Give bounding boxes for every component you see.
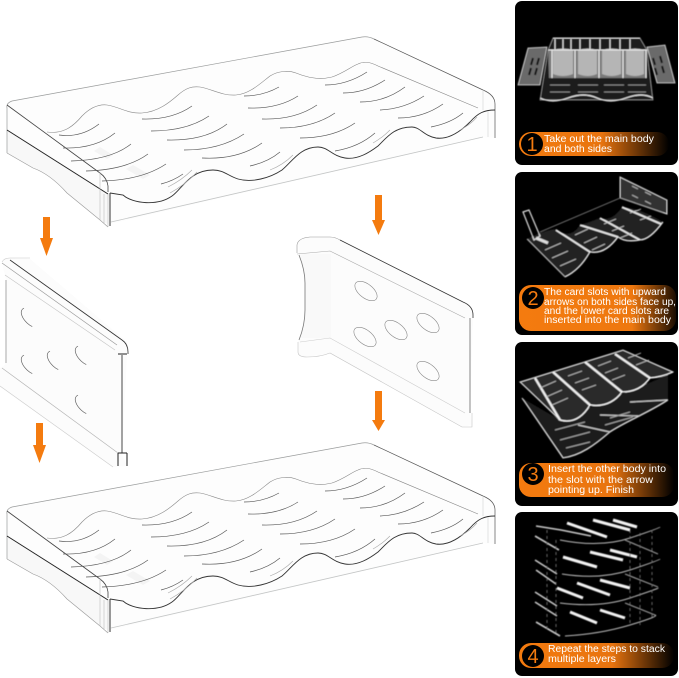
step 1 label: 1 [526,134,538,156]
step 2 label [519,285,676,331]
holes: right panel [350,277,443,385]
arrow: lower right [372,391,385,431]
side panel: right [297,237,473,427]
tray: bottom assembled body [6,443,495,633]
panel: step 1 [515,1,678,165]
step 4 photo: four stacked layers [535,520,660,636]
tray: top main body [6,37,495,227]
step 4 label: multiple layers [548,654,616,665]
step 4 label: Repeat the steps to stack [548,644,666,655]
side panel: left [0,258,128,467]
step 4 label [519,643,674,668]
step 2 label: arrows on both sides face up, [544,297,676,308]
step 2 label: 2 [528,288,539,310]
step 3 label: the slot with the arrow [548,475,654,486]
arrow: top left [40,217,53,256]
panel: step 2 [515,172,678,335]
arrow: lower left [33,423,46,463]
step 2 label: inserted into the main body [544,315,671,326]
step 1 label: Take out the main body [544,134,654,145]
panel: step 3 [515,342,678,506]
arrow: top right [372,195,385,235]
step 3 photo: stacked bodies [520,350,673,458]
step 3 label: pointing up. Finish [548,485,634,496]
holes: left panel [18,304,100,419]
step 1 label [519,132,669,156]
step 4 label: 4 [528,646,539,668]
step 3 label [519,463,674,497]
step 3 label: 3 [528,464,539,486]
step 3 label: Insert the other body into [548,464,666,475]
step 2 photo: inserting sides [523,177,667,277]
step 1 photo: tray and sides [518,38,675,101]
step 1 label: and both sides [544,144,612,155]
step 2 label: The card slots with upward [544,287,666,298]
step 2 label: and the lower card slots are [544,306,669,317]
panel: step 4 [515,512,678,676]
